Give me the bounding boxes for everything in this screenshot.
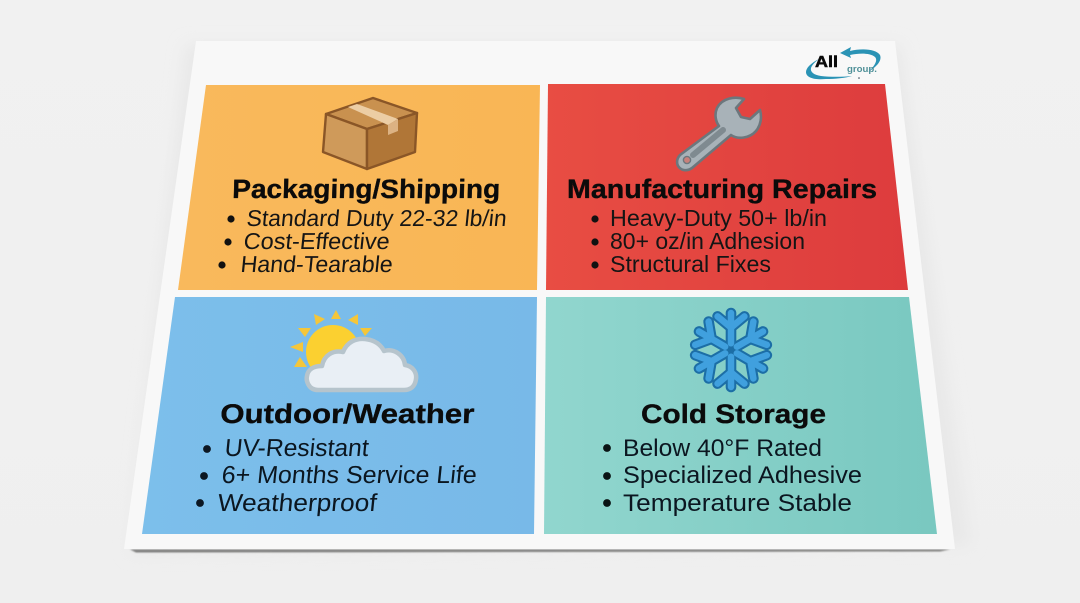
icon: snowflake bbox=[692, 313, 770, 387]
panel: outdoor/weather bbox=[142, 297, 537, 534]
bullet list: Weatherproof bbox=[216, 490, 378, 517]
poster sheet bbox=[124, 41, 955, 549]
bullet list: Cost-Effective bbox=[243, 228, 391, 254]
bullet list bbox=[591, 205, 827, 277]
panel: cold storage bbox=[544, 297, 937, 534]
bullet list: Standard Duty 22-32 lb/in bbox=[246, 205, 508, 231]
bullet list: Temperature Stable bbox=[623, 490, 852, 517]
poster shadow bbox=[130, 45, 970, 553]
icon: cardboard box bbox=[323, 98, 417, 169]
bullet list bbox=[196, 435, 478, 517]
heading: Manufacturing Repairs bbox=[567, 174, 877, 204]
icon: wrench bbox=[677, 98, 761, 170]
bullet list: UV-Resistant bbox=[223, 435, 370, 462]
logo swoosh bbox=[806, 47, 880, 79]
bullet list: Heavy-Duty 50+ lb/in bbox=[610, 205, 827, 231]
bullet list: Structural Fixes bbox=[610, 251, 771, 277]
bullet list: Hand-Tearable bbox=[240, 251, 394, 277]
panel: manufacturing repairs bbox=[546, 84, 908, 290]
logo bbox=[806, 47, 880, 79]
bullet list: 6+ Months Service Life bbox=[220, 462, 478, 489]
heading: Outdoor/Weather bbox=[220, 399, 476, 429]
panel: packaging/shipping bbox=[178, 85, 540, 290]
icon: sun and cloud bbox=[290, 310, 416, 390]
logo wordmark: All bbox=[815, 54, 838, 71]
heading: Packaging/Shipping bbox=[232, 174, 501, 204]
logo group text: group. bbox=[847, 64, 877, 75]
bullet list bbox=[603, 435, 862, 517]
bullet list: 80+ oz/in Adhesion bbox=[610, 228, 805, 254]
heading: Cold Storage bbox=[641, 399, 826, 429]
bullet list bbox=[218, 205, 508, 277]
bullet list: Below 40°F Rated bbox=[623, 435, 822, 462]
bullet list: Specialized Adhesive bbox=[623, 462, 862, 489]
